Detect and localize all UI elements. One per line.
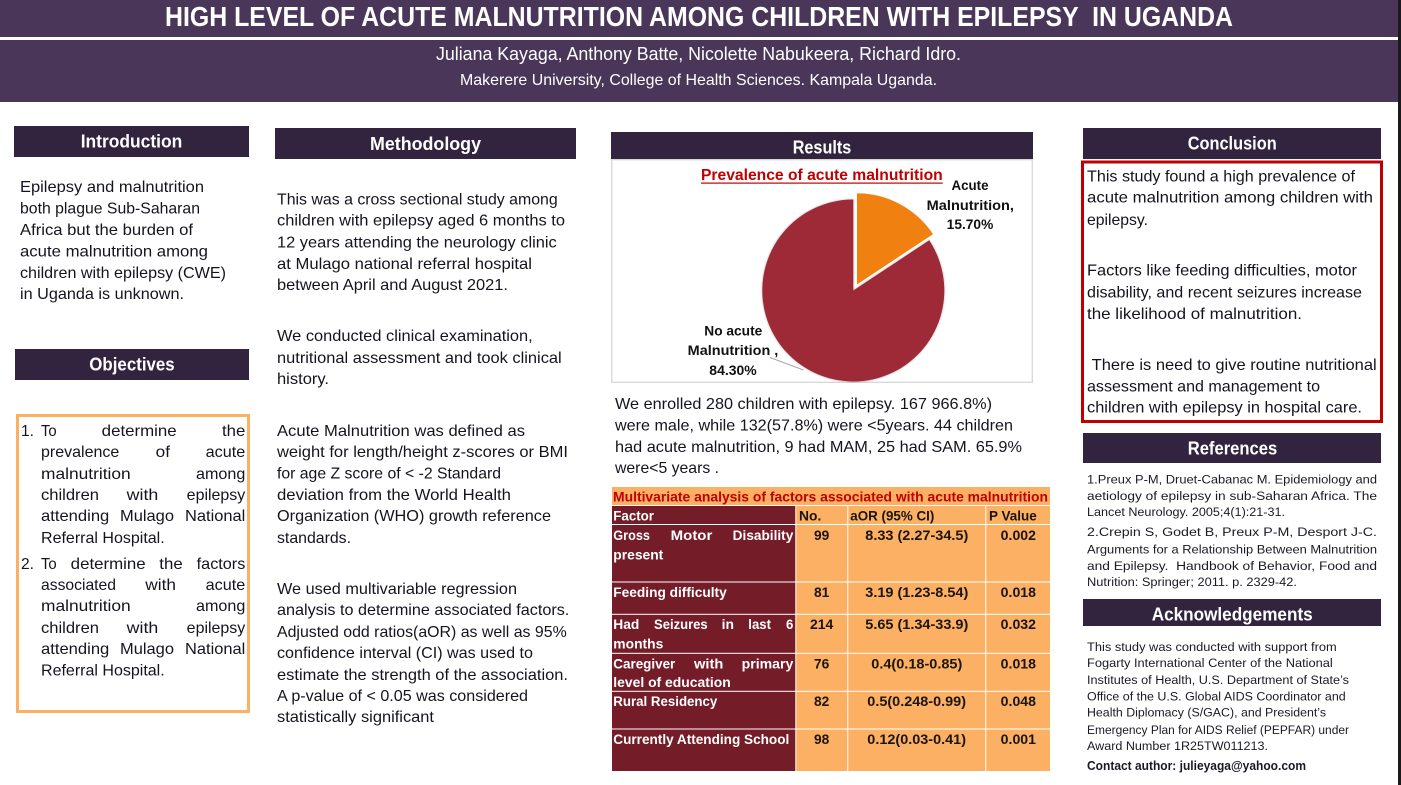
text: objective list: To [41, 556, 57, 573]
text: methodology body: at Mulago national referral hospital [277, 256, 532, 273]
text: reference list: aetiology of epilepsy in sub-Saharan Africa. The [1087, 489, 1377, 503]
panel: results [611, 132, 1050, 771]
text: reference list: and Epilepsy. Handbook of Behavior, Food and [1087, 559, 1377, 573]
column: number: 98 [814, 732, 830, 747]
column: p value: 0.048 [1001, 694, 1036, 709]
text: acknowledgements body [1087, 640, 1349, 753]
column: factor: last [748, 617, 772, 632]
text: methodology body: Adjusted odd ratios(aOR) as well as 95% [277, 624, 567, 641]
text: methodology body: weight for length/height z-scores or BMI [276, 444, 568, 461]
text: objective list: 1. [21, 423, 34, 440]
text: objective list: with [126, 620, 158, 637]
column: factor: Feeding difficulty [613, 585, 727, 600]
title: HIGH LEVEL OF ACUTE MALNUTRITION AMONG CHILDREN WITH EPILEPSY IN UGANDA [165, 1, 1233, 32]
column: factor: Rural Residency [613, 694, 718, 709]
column: p value: 0.002 [1001, 528, 1036, 543]
text: objective list: Referral Hospital. [41, 530, 165, 547]
leader line [770, 358, 804, 370]
label: acute malnutrition: Malnutrition, [927, 198, 1014, 213]
panel: conclusion [1082, 128, 1382, 422]
text: conclusion body: children with epilepsy in hospital care. [1087, 400, 1362, 417]
label: acute malnutrition: 15.70% [947, 217, 993, 232]
text: results summary: were male, while 132(57.8%) were <5years. 44 children [614, 418, 1013, 435]
text: objective list: To [41, 423, 57, 440]
heading: objectives: Objectives [89, 354, 175, 374]
text: objective list: acute [206, 577, 246, 594]
text: objective list: attending [41, 508, 109, 525]
text: methodology body: statistically significant [277, 709, 435, 726]
text: methodology body: This was a cross sectional study among [277, 191, 558, 208]
text: acknowledgements body: Award Number 1R25TW011213. [1087, 739, 1268, 753]
text: conclusion body: disability, and recent seizures increase [1087, 285, 1362, 302]
text: conclusion body: epilepsy. [1087, 212, 1148, 229]
text: methodology body: Acute Malnutrition was defined as [277, 423, 525, 440]
text: conclusion body: the likelihood of malnutrition. [1087, 306, 1302, 323]
text: results summary [614, 396, 1022, 477]
column: adjusted odds ratio: 8.33 (2.27-34.5) [865, 528, 968, 543]
column: factor: Currently Attending School [613, 732, 789, 747]
text: conclusion body [1087, 169, 1377, 417]
text: results summary: had acute malnutrition, 9 had MAM, 25 had SAM. 65.9% [615, 439, 1022, 456]
text: objective list: prevalence [41, 444, 120, 461]
text: objective list: acute [206, 444, 246, 461]
text: objective list: among [196, 466, 245, 483]
text: reference list: Arguments for a Relationship Between Malnutrition [1087, 542, 1377, 556]
text: methodology body: confidence interval (CI) was used to [277, 645, 533, 662]
text: objective list: of [156, 444, 171, 461]
heading: conclusion [1083, 128, 1381, 159]
objectives box [18, 416, 248, 712]
text: introduction body: Africa but the burden of [20, 222, 194, 239]
text: objective list: determine [71, 556, 146, 573]
pie slice: no acute malnutrition [762, 200, 944, 382]
label: no acute malnutrition: No acute [704, 324, 763, 339]
heading: acknowledgements [1083, 599, 1381, 626]
text: objective list: attending [41, 641, 109, 658]
text: methodology body: for age Z score of < -2 Standard [277, 466, 501, 482]
panel: introduction [14, 126, 249, 303]
column: factor: present [613, 547, 664, 562]
text: methodology body: We conducted clinical examination, [277, 328, 533, 345]
column: factor: Gross [613, 528, 650, 543]
text: objective list: with [144, 577, 176, 594]
column: adjusted odds ratio: aOR (95% CI) [850, 508, 934, 524]
text: introduction body: in Uganda is unknown. [20, 286, 184, 303]
column: adjusted odds ratio: 0.5(0.248-0.99) [867, 694, 966, 709]
heading: results: Results [793, 138, 851, 158]
text: methodology body: 12 years attending the neurology clinic [277, 234, 557, 251]
text: methodology body: Organization (WHO) growth reference [277, 508, 551, 525]
text: introduction body: acute malnutrition among [20, 244, 208, 260]
column: factor [613, 508, 794, 747]
column: number: 82 [814, 694, 830, 709]
table title: Multivariate analysis of factors associated with acute malnutrition [613, 489, 1048, 505]
column: factor: Caregiver [613, 656, 676, 671]
text: methodology body: standards. [277, 530, 351, 547]
text: methodology body [276, 191, 569, 726]
text: methodology body: estimate the strength of the association. [277, 667, 568, 684]
column: number: 81 [814, 585, 830, 600]
text: objective list: 2. [21, 556, 34, 573]
text: acknowledgements body: Health Diplomacy (S/GAC), and President’s [1087, 706, 1326, 720]
column: number: 99 [814, 528, 830, 543]
heading: references [1083, 433, 1381, 463]
text: reference list: Lancet Neurology. 2005;4(1):21-31. [1087, 505, 1285, 519]
text: methodology body: children with epilepsy aged 6 months to [277, 213, 565, 230]
text: conclusion body: Factors like feeding difficulties, motor [1087, 263, 1357, 280]
conclusion box [1082, 162, 1382, 422]
text: introduction body: Epilepsy and malnutrition [20, 179, 204, 196]
text: objective list: children [41, 487, 99, 504]
text: conclusion body: assessment and management to [1087, 379, 1320, 396]
text: objective list: determine [102, 423, 177, 440]
header banner [0, 0, 1398, 102]
text: acknowledgements body: Office of the U.S. Global AIDS Coordinator and [1087, 690, 1346, 704]
panel: methodology [275, 128, 576, 726]
text: conclusion body: This study found a high prevalence of [1087, 169, 1356, 186]
column: p value: 0.018 [1001, 656, 1036, 671]
label: acute malnutrition [927, 178, 1014, 232]
label: no acute malnutrition: 84.30% [709, 363, 757, 378]
text: methodology body: A p-value of < 0.05 was considered [277, 688, 528, 705]
text: objective list: Mulago [120, 508, 174, 525]
column: number: No. [799, 508, 821, 524]
text: methodology body: between April and August 2021. [277, 277, 508, 294]
text: acknowledgements body: This study was conducted with support from [1087, 640, 1337, 654]
label: no acute malnutrition [688, 324, 778, 378]
heading: methodology: Methodology [370, 134, 481, 154]
column: number: 214 [810, 617, 834, 632]
chart title: Prevalence of acute malnutrition [701, 167, 943, 184]
text: objective list: National [185, 641, 245, 658]
column: adjusted odds ratio: 3.19 (1.23-8.54) [865, 585, 968, 600]
column: p value: 0.001 [1001, 732, 1036, 747]
text: introduction body: children with epilepsy (CWE) [20, 265, 226, 282]
text: objective list: National [185, 508, 245, 525]
text: objective list: among [196, 598, 245, 615]
column: factor: in [722, 617, 734, 632]
column: p value: 0.018 [1001, 585, 1036, 600]
column: adjusted odds ratio: 0.4(0.18-0.85) [871, 656, 962, 671]
text: introduction body: both plague Sub-Saharan [20, 200, 200, 218]
text: methodology body: We used multivariable regression [277, 581, 517, 598]
heading: references: References [1188, 438, 1277, 458]
panel: objectives [15, 349, 249, 712]
text: conclusion body: There is need to give routine nutritional [1092, 357, 1377, 374]
heading: introduction [14, 126, 249, 157]
text: conclusion body: acute malnutrition among children with [1087, 190, 1373, 207]
text: objective list: malnutrition [41, 466, 131, 483]
column: p value: 0.032 [1001, 617, 1036, 632]
column: factor: 6 [786, 617, 793, 632]
column: factor: months [613, 636, 663, 651]
heading: results [611, 132, 1033, 159]
text: results summary: We enrolled 280 children with epilepsy. 167 966.8%) [615, 396, 992, 413]
column: factor: level of education [613, 675, 731, 690]
column: adjusted odds ratio: 0.12(0.03-0.41) [867, 732, 966, 747]
column: factor: Seizures [654, 617, 708, 632]
text: acknowledgements body: Emergency Plan for AIDS Relief (PEPFAR) under [1087, 723, 1349, 737]
column: number [799, 508, 834, 747]
text: objective list: the [222, 423, 246, 440]
affiliation: Makerere University, College of Health Sciences. Kampala Uganda. [460, 72, 937, 89]
text: objective list [21, 423, 246, 680]
text: objective list: epilepsy [187, 487, 245, 504]
text: methodology body: analysis to determine associated factors. [277, 602, 569, 619]
text: methodology body: deviation from the World Health [277, 487, 511, 504]
label: acute malnutrition: Acute [952, 178, 989, 193]
text: objective list: Mulago [120, 641, 174, 658]
text: objective list: the [159, 556, 183, 573]
panel: acknowledgements [1083, 599, 1381, 773]
text: reference list: Nutrition: Springer; 2011. p. 2329-42. [1087, 575, 1297, 589]
text: objective list: associated [41, 577, 116, 594]
pie chart: prevalence of acute malnutrition [612, 160, 1032, 382]
text: reference list [1087, 472, 1377, 589]
heading: objectives [15, 349, 249, 380]
text: results summary: were<5 years . [614, 460, 719, 477]
text: objective list: Referral Hospital. [41, 662, 165, 680]
label: no acute malnutrition: Malnutrition , [688, 343, 778, 358]
column: factor: with [693, 656, 723, 671]
column: factor: Factor [613, 508, 655, 524]
text: objective list: with [126, 487, 158, 504]
heading: methodology [275, 128, 576, 159]
text: objective list: children [41, 620, 99, 637]
column: p value [989, 508, 1037, 747]
text: introduction body [20, 179, 226, 303]
text: objective list: factors [197, 556, 245, 573]
heading: introduction: Introduction [81, 132, 182, 152]
text: contact author: Contact author: julieyaga@yahoo.com [1087, 759, 1306, 773]
column: number: 76 [814, 656, 830, 671]
column: factor: Motor [671, 528, 713, 543]
column: adjusted odds ratio [850, 508, 968, 747]
column: factor: primary [742, 656, 794, 671]
heading: acknowledgements: Acknowledgements [1152, 604, 1313, 624]
column: factor: Disability [733, 528, 794, 543]
pie slice: acute malnutrition [857, 193, 933, 285]
text: reference list: 1.Preux P-M, Druet-Cabanac M. Epidemiology and [1087, 472, 1377, 486]
text: methodology body: nutritional assessment and took clinical [277, 350, 562, 367]
text: acknowledgements body: Institutes of Health, U.S. Department of State’s [1087, 673, 1349, 687]
text: objective list: malnutrition [41, 598, 131, 615]
panel: references [1083, 433, 1381, 589]
column: factor: Had [613, 617, 639, 632]
text: methodology body: history. [277, 371, 329, 388]
column: p value: P Value [989, 508, 1037, 524]
text: acknowledgements body: Fogarty International Center of the National [1087, 656, 1333, 670]
table: multivariate analysis [612, 487, 1050, 771]
text: reference list: 2.Crepin S, Godet B, Preux P-M, Desport J-C. [1087, 525, 1377, 539]
heading: conclusion: Conclusion [1188, 134, 1277, 154]
text: objective list: epilepsy [187, 620, 245, 637]
authors: Juliana Kayaga, Anthony Batte, Nicolette Nabukeera, Richard Idro. [436, 44, 961, 64]
column: adjusted odds ratio: 5.65 (1.34-33.9) [865, 617, 968, 632]
